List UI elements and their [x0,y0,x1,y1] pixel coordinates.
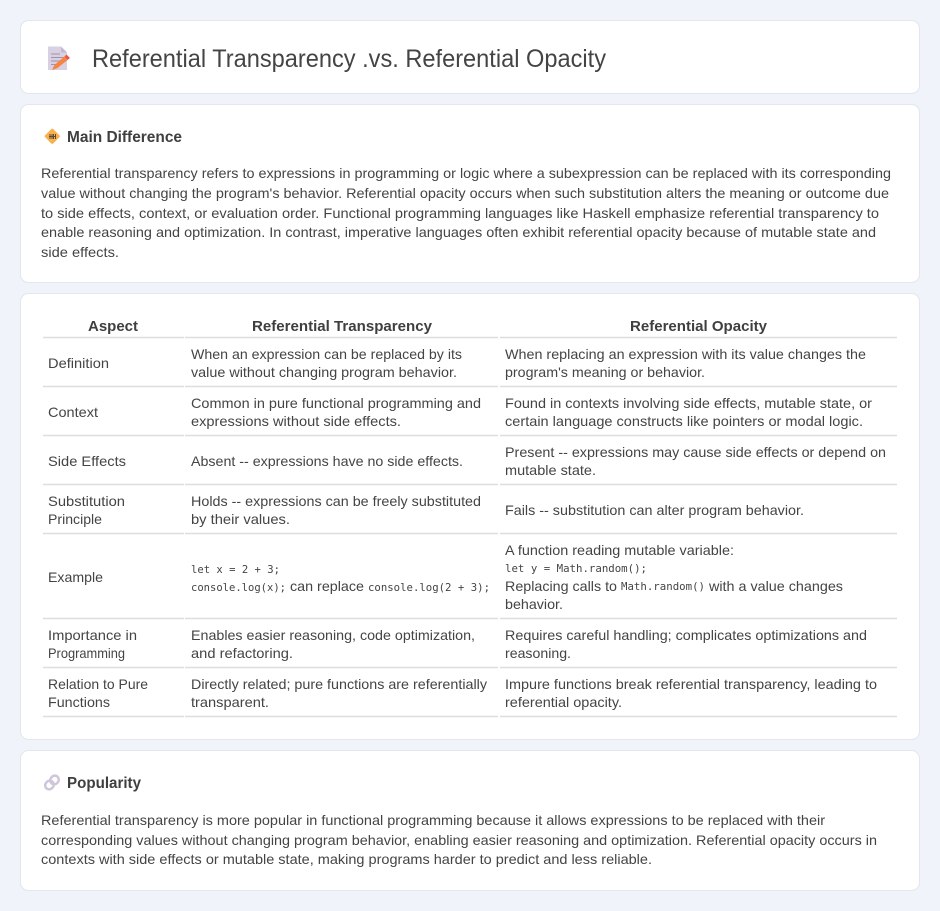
text block: main difference paragraph: side effects. [41,244,119,260]
row: context: expressions without side effects. [191,413,401,429]
text block: popularity paragraph: Referential transparency is more popular in functional programming because it allows expressions to be replaced with their [41,812,825,828]
row: definition: value without changing program behavior. [191,364,457,380]
row: context: Found in contexts involving side effects, mutable state, or [505,395,872,411]
row: example: A function reading mutable variable: [505,542,734,558]
row: importance in programming: Programming [48,645,125,661]
row: relation to pure functions: Functions [48,694,110,710]
row: side effects: Side Effects [48,453,126,469]
row: definition: When an expression can be replaced by its [191,346,462,362]
row: example: Example [48,569,103,585]
row: relation to pure functions: Impure functions break referential transparency, leading to [505,676,877,692]
row: relation to pure functions: referential opacity. [505,694,622,710]
heading: main difference: Main Difference [67,129,182,146]
row: side effects [48,444,886,478]
row: side effects: mutable state. [505,462,596,478]
panel: popularity [20,750,920,890]
row: importance in programming: and refactoring. [191,645,293,661]
row: importance in programming: Enables easier reasoning, code optimization, [191,627,475,643]
row: example: can replace [290,578,364,594]
row: substitution principle: Substitution [48,493,125,509]
row: relation to pure functions [48,676,877,710]
row: example: behavior. [505,596,563,612]
table header row: Aspect [88,318,138,335]
row: example: let y = Math.random(); [505,563,647,575]
row: context [48,395,872,429]
row: importance in programming [48,627,867,661]
row: importance in programming: reasoning. [505,645,571,661]
text block: popularity paragraph: corresponding values without changing program behavior, enabling easier reasoning and optimization. Referential opacity occurs in [41,832,877,848]
row: substitution principle: Principle [48,511,102,527]
row: substitution principle [48,493,804,527]
row: example: Math.random() [621,581,705,593]
table header row [88,318,768,335]
row: relation to pure functions: Relation to Pure [48,676,148,692]
row: definition [48,346,866,380]
row: context: Common in pure functional programming and [191,395,481,411]
row: side effects: Present -- expressions may cause side effects or depend on [505,444,886,460]
row: example [48,542,843,612]
text block: main difference paragraph: Referential transparency refers to expressions in programming or logic where a subexpression can be replaced with its corresponding [41,165,891,181]
row: relation to pure functions: Directly related; pure functions are referentially [191,676,487,692]
panel: main difference [20,104,920,282]
row: context: certain language constructs like pointers or modal logic. [505,413,863,429]
row: importance in programming: Requires careful handling; complicates optimizations and [505,627,867,643]
text block: popularity paragraph [41,812,877,867]
icon: warning diamond [44,128,60,144]
text block: main difference paragraph: enable reasoning and optimization. In contrast, imperative languages often exhibit referential opacity because of mutable state and [41,224,876,240]
heading: popularity: Popularity [67,775,141,792]
title: Referential Transparency .vs. Referential Opacity [92,45,606,73]
row: substitution principle: by their values. [191,511,290,527]
text block: main difference paragraph [41,165,891,260]
row: example: console.log(x); [191,582,286,594]
row: substitution principle: Holds -- expressions can be freely substituted [191,493,481,509]
row: example: console.log(2 + 3); [368,582,490,594]
icon: link [44,774,60,791]
row: definition: Definition [48,355,109,371]
text block: main difference paragraph: value without changing the program's behavior. Referential opacity occurs when such substitution alters the meaning or outcome due [41,185,889,201]
row: relation to pure functions: transparent. [191,694,269,710]
row: definition: program's meaning or behavior. [505,364,705,380]
row: example: with a value changes [708,578,843,594]
row: example: let x = 2 + 3; [191,564,280,576]
table header row: Referential Transparency [252,318,433,335]
panel: comparison table [20,294,920,740]
row: substitution principle: Fails -- substitution can alter program behavior. [505,502,804,518]
row: example: Replacing calls to [505,578,617,594]
text block: main difference paragraph: to side effects, context, or evaluation order. Functional programming languages like Haskell emphasize referential transparency to [41,205,879,221]
row: importance in programming: Importance in [48,627,137,643]
row: side effects: Absent -- expressions have no side effects. [191,453,463,469]
panel: header [20,20,920,94]
text block: popularity paragraph: contexts with side effects or mutable state, making programs harder to predict and less reliable. [41,851,652,867]
table header row: Referential Opacity [630,318,768,335]
icon: memo with pencil [48,46,70,70]
row: context: Context [48,404,98,420]
row: definition: When replacing an expression with its value changes the [505,346,866,362]
